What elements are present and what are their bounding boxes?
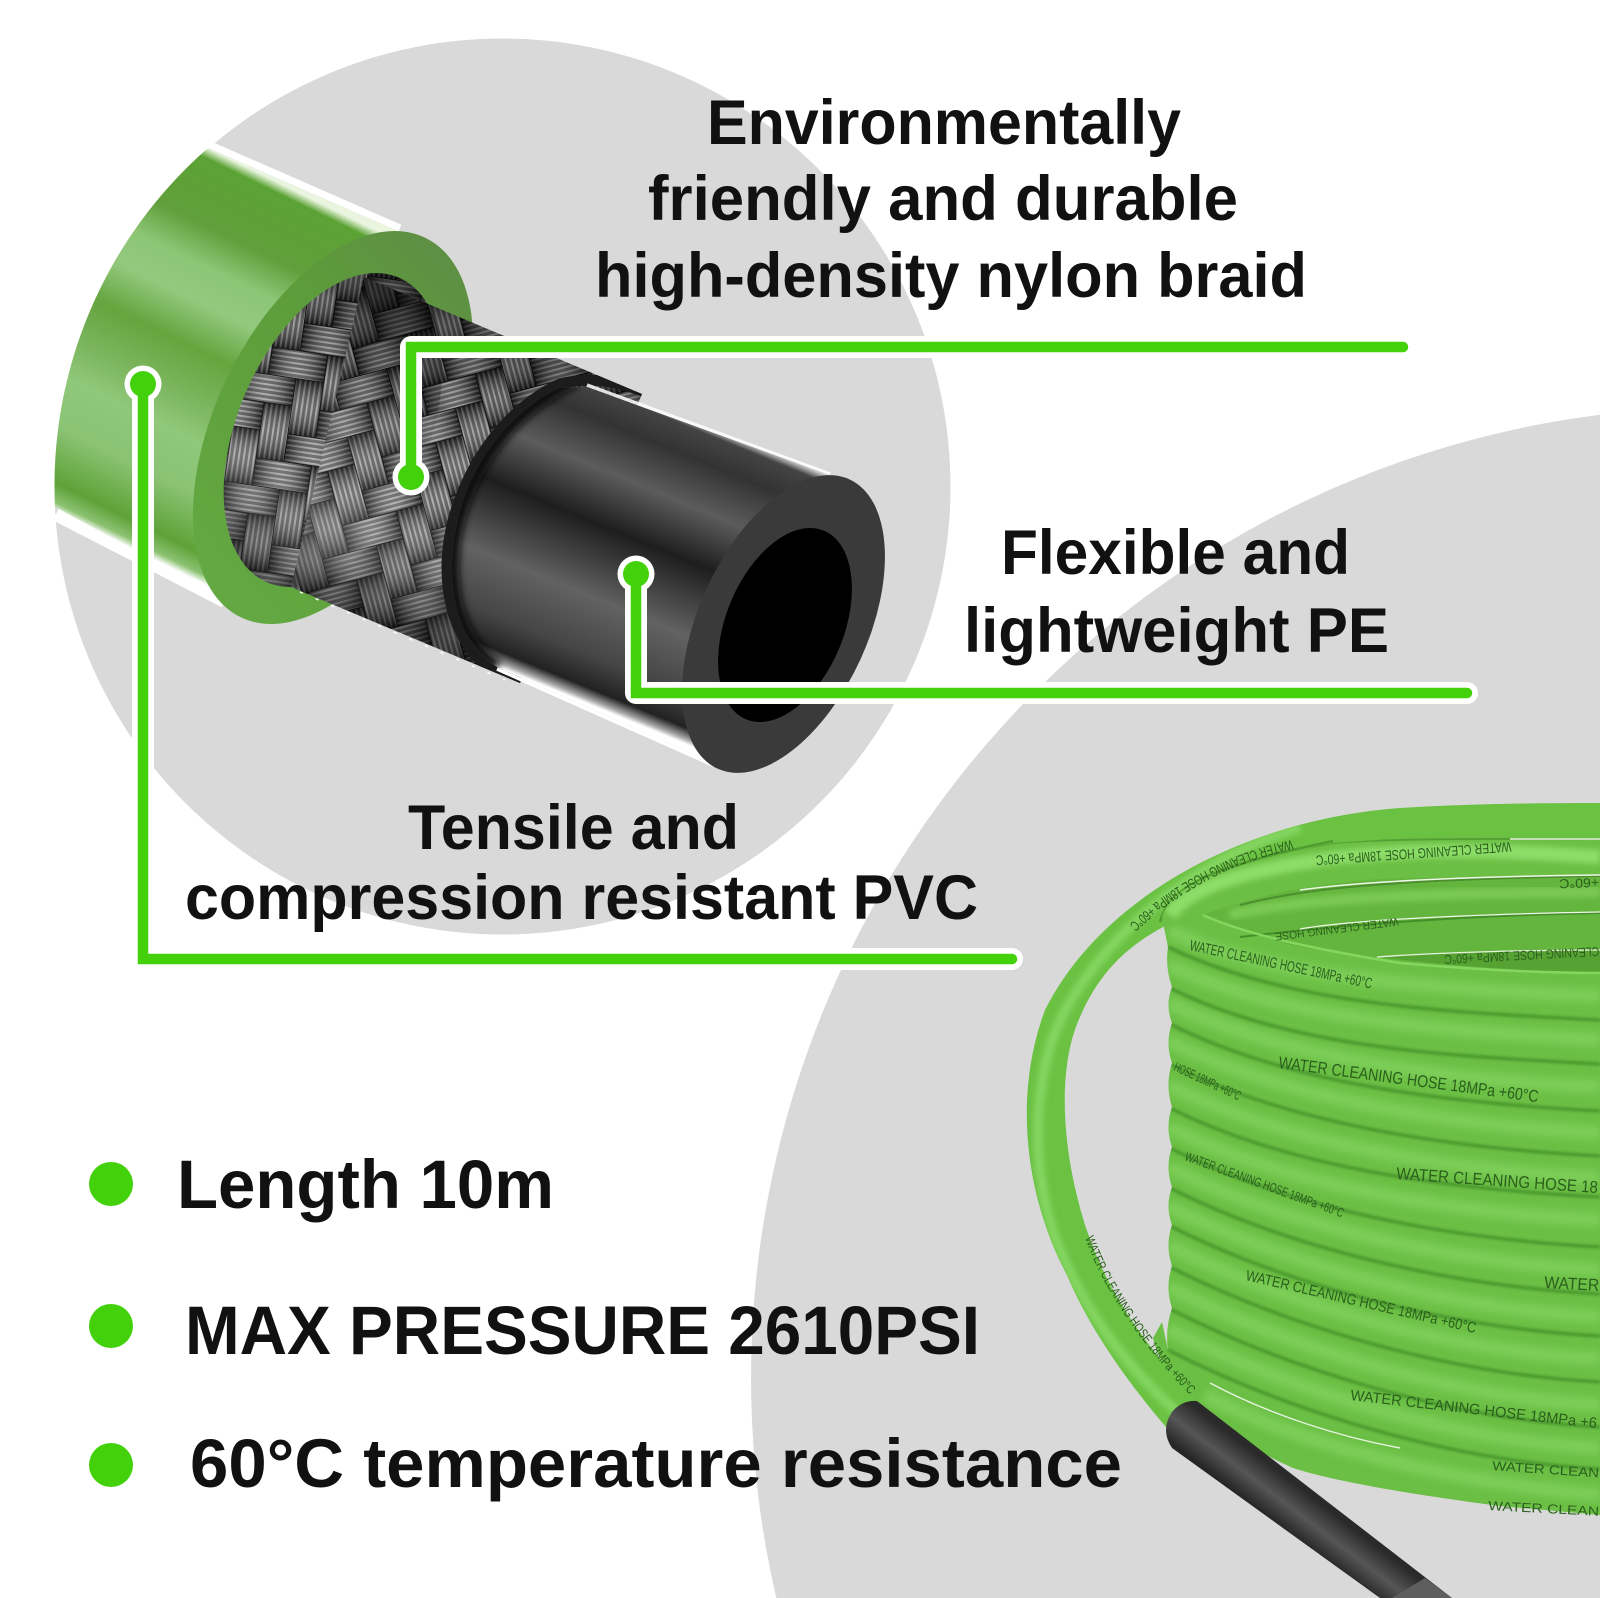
coil rim edge xyxy=(1160,841,1333,922)
coil of green hose xyxy=(1026,803,1600,1598)
coil front turns xyxy=(1168,915,1600,1495)
spec: length: Length 10m xyxy=(177,1146,554,1223)
outer hose loop, upper part xyxy=(1027,803,1600,1428)
black PE inner tube xyxy=(442,374,885,773)
heading: PE: Flexible and xyxy=(1001,518,1350,588)
heading: PE xyxy=(964,518,1389,666)
heading: PVC: Tensile and xyxy=(408,793,739,863)
panel: upper gray circle xyxy=(54,38,950,934)
coil inner well xyxy=(1203,876,1600,973)
heading: nylon braid: friendly and durable xyxy=(648,164,1238,234)
hose printed markings: WATER CLEANING HOSE 18MPa +60°C xyxy=(1130,840,1294,930)
hose printed markings xyxy=(1086,839,1600,1519)
hose printed markings: WATER CLEAN xyxy=(1492,1458,1600,1480)
heading: PE: lightweight PE xyxy=(964,596,1389,666)
nylon braid layer xyxy=(180,240,642,683)
callout: PE leader xyxy=(618,556,1467,693)
heading: PVC xyxy=(185,793,978,933)
hose printed markings: WATER CLEANING HOSE 18MPa +6 xyxy=(1350,1387,1598,1432)
heading: nylon braid: Environmentally xyxy=(707,88,1181,158)
heading: PVC: compression resistant PVC xyxy=(185,863,978,933)
heading: nylon braid: high-density nylon braid xyxy=(595,241,1307,311)
coil rear turns xyxy=(1170,839,1600,957)
callout: PVC leader xyxy=(124,366,1012,959)
hose printed markings: WATER CLEANING HOSE 18MPa +60°C xyxy=(1183,1149,1346,1220)
green outer PVC layer xyxy=(54,144,531,668)
hose printed markings: WATER CLEANING HOSE 18MPa +60°C xyxy=(1188,937,1374,993)
hose printed markings: HOSE 18MPa +60°C xyxy=(1172,1059,1243,1103)
hose printed markings: WATER CLEAN xyxy=(1488,1498,1599,1519)
hose printed markings: WATER CLEANING HOSE 18MPa +60°C xyxy=(1244,1267,1478,1337)
black hose sleeve xyxy=(1166,1401,1452,1598)
spec: max pressure: MAX PRESSURE 2610PSI xyxy=(185,1292,980,1369)
callout: braid leader xyxy=(392,347,1403,496)
hose printed markings: +60°C xyxy=(1559,875,1599,891)
coil body xyxy=(1150,835,1600,1525)
hose printed markings: WATER CLEANING HOSE 18MPa +60°C xyxy=(1086,1234,1195,1394)
panel: lower right gray circle xyxy=(751,415,1600,1598)
hose printed markings: WATER CLEANING HOSE 18MPa +60°C xyxy=(1277,1053,1540,1106)
hose printed markings: WATER CLEANING HOSE 18MPa +60°C xyxy=(1315,839,1512,869)
hose printed markings: CLEANING HOSE 18MPa +60°C xyxy=(1444,944,1600,967)
hose printed markings: WATER CLEANING HOSE xyxy=(1275,915,1399,942)
hose cross-section illustration xyxy=(54,144,927,804)
spec: temperature: 60°C temperature resistance xyxy=(190,1425,1122,1502)
outer hose loop, lower part xyxy=(1047,1230,1166,1428)
heading: nylon braid xyxy=(595,88,1307,311)
